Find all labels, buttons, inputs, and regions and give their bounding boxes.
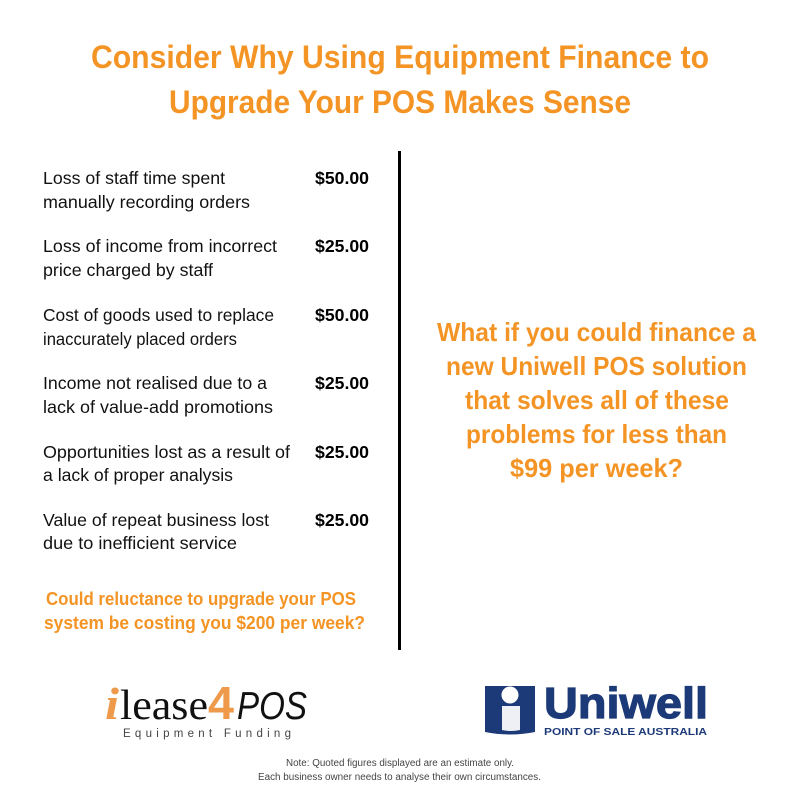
logo: ilease4POS: i — [105, 678, 119, 729]
cost item: promotions: lack of value-add promotions — [43, 397, 273, 417]
cost item: staff time — [43, 168, 369, 212]
cost item: analysis: Opportunities lost as a result of — [43, 442, 290, 462]
logo: ilease4POS: POS — [237, 685, 307, 728]
left callout question: Could reluctance to upgrade your POS — [46, 589, 356, 609]
cost item: repeat business: due to inefficient service — [43, 533, 237, 553]
cost item: analysis: $25.00 — [315, 442, 369, 462]
cost item: incorrect price — [43, 236, 369, 280]
logo: ilease4POS: 4 — [208, 677, 234, 729]
cost item: cost of goods: $50.00 — [315, 305, 369, 325]
right callout question: that solves all of these — [465, 385, 729, 415]
footnote: Note: Quoted figures displayed are an estimate only. — [286, 758, 514, 769]
logo: ilease4POS — [105, 677, 307, 740]
cost item: promotions — [43, 373, 369, 417]
right callout question: $99 per week? — [510, 453, 683, 483]
cost item: promotions: Income not realised due to a — [43, 373, 267, 393]
cost item: incorrect price: Loss of income from incorrect — [43, 236, 277, 256]
cost item: cost of goods: inaccurately placed orders — [43, 329, 237, 349]
logo mark — [485, 686, 535, 734]
logo: ilease4POS: Equipment Funding — [123, 728, 291, 740]
left callout question — [44, 589, 365, 633]
right callout question — [437, 317, 757, 483]
right callout question: problems for less than — [466, 419, 727, 449]
cost item: staff time: $50.00 — [315, 168, 369, 188]
cost item: staff time: Loss of staff time spent — [43, 168, 225, 188]
cost item: incorrect price: $25.00 — [315, 236, 369, 256]
cost item: cost of goods — [43, 305, 369, 349]
right callout question: What if you could finance a — [437, 317, 757, 347]
cost item: cost of goods: Cost of goods used to replace — [43, 305, 274, 325]
footnote: Each business owner needs to analyse their own circumstances. — [258, 772, 541, 783]
cost list panel — [43, 168, 369, 553]
cost item: staff time: manually recording orders — [43, 192, 250, 212]
logo: ilease4POS: lease — [120, 683, 208, 729]
logo: Uniwell: POINT OF SALE AUSTRALIA — [544, 727, 707, 738]
cost item: analysis — [43, 442, 369, 485]
cost item: promotions: $25.00 — [315, 373, 369, 393]
cost item: repeat business: $25.00 — [315, 510, 369, 530]
title: Upgrade Your POS Makes Sense — [169, 84, 631, 120]
title: Consider Why Using Equipment Finance to — [91, 39, 709, 75]
right callout question: new Uniwell POS solution — [446, 351, 747, 381]
cost item: incorrect price: price charged by staff — [43, 260, 213, 280]
logo: Uniwell: Uniwell — [544, 679, 708, 728]
footnote — [258, 758, 541, 783]
cost item: repeat business — [43, 510, 369, 553]
title — [91, 39, 709, 120]
vertical divider — [398, 151, 401, 650]
logo: Uniwell — [485, 679, 708, 738]
cost item: analysis: a lack of proper analysis — [43, 465, 233, 485]
cost item: repeat business: Value of repeat business lost — [43, 510, 269, 530]
left callout question: system be costing you $200 per week? — [44, 613, 365, 633]
